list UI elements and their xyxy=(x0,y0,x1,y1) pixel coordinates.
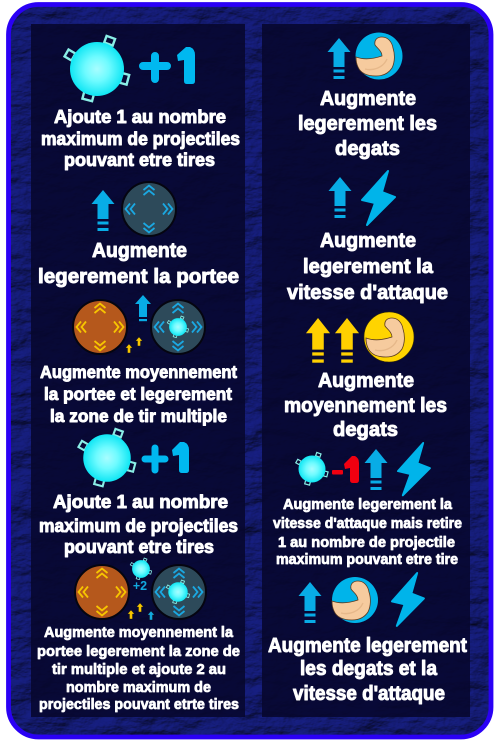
text: medium range, slight multishot, two projectiles: projectiles pouvant etrte tires xyxy=(39,696,239,713)
text: add one projectile: pouvant etre tires xyxy=(64,150,215,170)
text: add one projectile, second: Ajoute 1 au nombre xyxy=(53,492,228,512)
text: slightly increases damage: degats xyxy=(335,138,400,160)
text: slightly increases attack speed: vitesse d'attaque xyxy=(287,282,448,304)
text: moderately increases damage xyxy=(284,370,447,441)
icon: range and multishot circles xyxy=(73,295,205,354)
text: medium range, slight multishot, two projectiles: nombre maximum de xyxy=(66,679,211,696)
text: slightly increases damage: Augmente xyxy=(320,88,416,110)
text: medium range and slight multishot: Augmente moyennement xyxy=(40,362,237,382)
text: slightly increases attack speed xyxy=(287,230,448,304)
icon: range, multishot and plus two xyxy=(75,558,206,620)
text: add one projectile: Ajoute 1 au nombre xyxy=(54,107,226,127)
text: slightly increases damage: legerement les xyxy=(298,113,437,135)
text: slightly increases damage xyxy=(298,88,437,160)
text: slightly increases range: Augmente xyxy=(92,240,187,262)
icon: range, multishot and plus two: +2 xyxy=(133,579,147,593)
icon: arrow and blue arm xyxy=(328,32,402,80)
text: moderately increases damage: Augmente xyxy=(318,370,414,392)
text: medium range, slight multishot, two projectiles: tir multiple et ajoute 2 au xyxy=(52,661,226,678)
icon: two yellow arrows and yellow arm xyxy=(306,312,414,363)
text: attack speed up, one projectile less: vitesse d'attaque mais retire xyxy=(273,516,462,532)
text: moderately increases damage: moyennement les xyxy=(284,395,447,417)
panel: left column xyxy=(31,24,245,717)
text: attack speed up, one projectile less: 1 au nombre de projectile xyxy=(278,535,455,551)
text: add one projectile, second: maximum de projectiles xyxy=(39,516,238,536)
icon: arrow and range circle xyxy=(92,182,176,236)
icon: projectile plus one xyxy=(65,36,195,101)
text: slightly increases damage and speed: vitesse d'attaque xyxy=(293,683,445,705)
text: slightly increases range xyxy=(38,240,239,288)
text: medium range, slight multishot, two projectiles: Augmente moyennement la xyxy=(44,624,234,641)
text: slightly increases damage and speed xyxy=(268,635,467,705)
icon: projectile plus one, second xyxy=(78,429,189,486)
text: attack speed up, one projectile less xyxy=(273,497,462,568)
text: add one projectile: maximum de projectiles xyxy=(41,129,240,149)
text: slightly increases attack speed: Augmente xyxy=(320,230,416,252)
text: moderately increases damage: degats xyxy=(333,419,398,441)
icon: arrow, blue arm and bolt xyxy=(298,573,424,626)
icon: minus one projectile, arrow and bolt xyxy=(296,443,430,495)
text: medium range and slight multishot xyxy=(40,362,237,426)
text: attack speed up, one projectile less: maximum pouvant etre tire xyxy=(276,552,458,568)
text: medium range and slight multishot: la portee et legerement xyxy=(44,384,232,404)
text: add one projectile xyxy=(41,107,240,170)
text: attack speed up, one projectile less: Augmente legerement la xyxy=(283,497,453,513)
text: medium range, slight multishot, two projectiles xyxy=(37,624,240,713)
text: add one projectile, second: pouvant etre tires xyxy=(64,537,214,557)
icon: arrow and lightning bolt xyxy=(328,171,395,225)
text: slightly increases attack speed: legerement la xyxy=(303,256,434,278)
text: slightly increases damage and speed: les degats et la xyxy=(300,658,438,680)
text: medium range and slight multishot: la zone de tir multiple xyxy=(50,406,227,426)
text: add one projectile, second xyxy=(39,492,238,557)
text: slightly increases damage and speed: Augmente legerement xyxy=(268,635,467,657)
panel: right column xyxy=(262,24,470,717)
text: medium range, slight multishot, two projectiles: portee legerement la zone de xyxy=(37,643,240,660)
text: slightly increases range: legerement la portee xyxy=(38,266,239,288)
